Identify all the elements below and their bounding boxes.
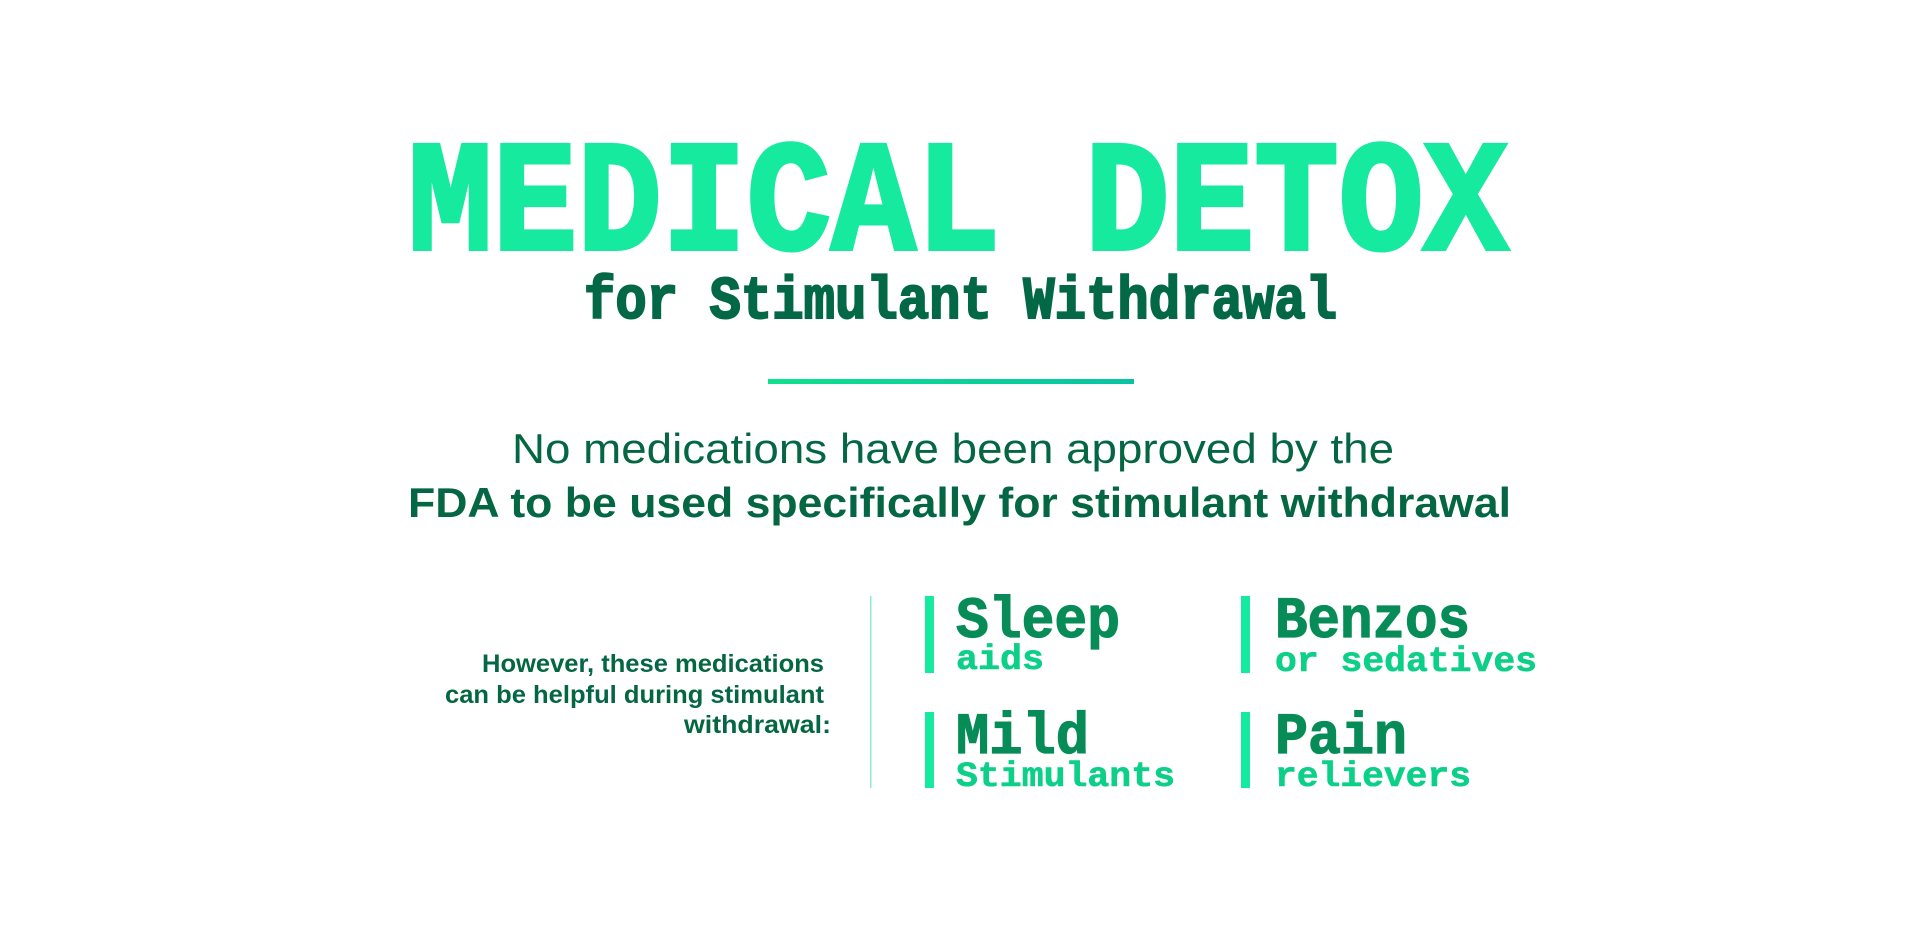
side note <box>445 650 831 739</box>
title: MEDICAL DETOX <box>408 118 1508 297</box>
item: sleep aids: Sleep <box>956 590 1120 655</box>
item: mild stimulants: Mild <box>956 706 1089 771</box>
item: pain relievers: relievers <box>1275 757 1471 797</box>
item: benzos or sedatives: Benzos <box>1275 590 1470 655</box>
item: sleep aids: aids <box>956 640 1044 680</box>
item: sleep aids <box>925 590 1120 680</box>
item: benzos or sedatives <box>1241 590 1537 682</box>
divider rule <box>768 379 1134 384</box>
item: mild stimulants <box>925 706 1175 797</box>
item: pain relievers: Pain <box>1275 706 1407 771</box>
side note: However, these medications <box>482 650 824 678</box>
statement line 2: FDA to be used specifically for stimulant withdrawal <box>408 479 1511 526</box>
vertical separator <box>870 596 872 788</box>
item: benzos or sedatives: or sedatives <box>1275 642 1537 682</box>
side note: withdrawal: <box>683 711 831 739</box>
item: pain relievers <box>1241 706 1471 797</box>
item: mild stimulants: Stimulants <box>956 757 1175 797</box>
subtitle: for Stimulant Withdrawal <box>584 269 1337 337</box>
side note: can be helpful during stimulant <box>445 681 825 709</box>
statement line 1: No medications have been approved by the <box>512 425 1394 472</box>
